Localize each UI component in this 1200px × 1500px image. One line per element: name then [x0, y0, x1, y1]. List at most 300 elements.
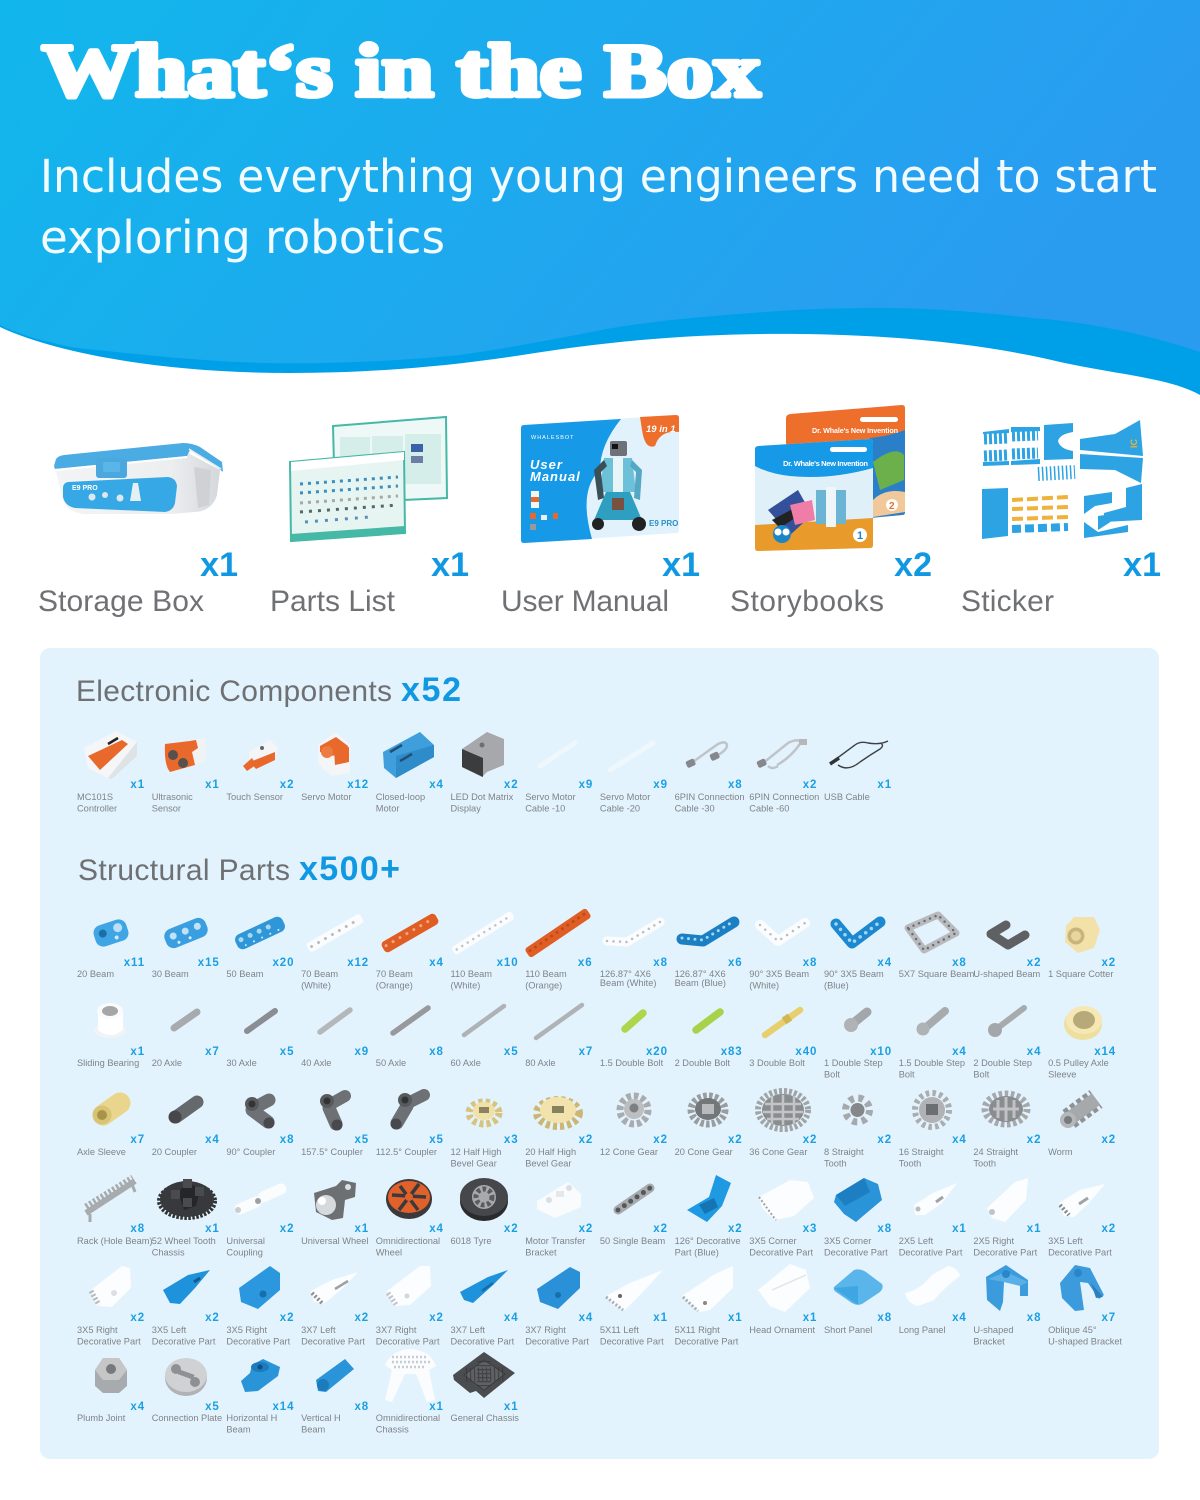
part: 2X5 Left Decorative Part: 2X5 Left	[899, 1236, 933, 1246]
part: 40 Axle: 40 Axle	[301, 1058, 331, 1068]
part: 126.87 4X6 Beam (Blue): x6	[728, 957, 743, 969]
part: 1.5 Double Step Bolt: x4	[952, 1046, 967, 1058]
item: storage box: E9 PRO	[72, 485, 98, 492]
quantity: user manual: x1	[662, 546, 700, 584]
part: 3X7 Left Decorative Part (Blue): Decorative Part	[450, 1336, 515, 1346]
part: 3X5 Left Decorative Part: x2	[1102, 1223, 1116, 1235]
part: 16 Straight Tooth	[899, 1093, 967, 1168]
part: Motor Transfer Bracket: Motor Transfer	[525, 1236, 585, 1246]
part: 60 Axle: x5	[504, 1046, 518, 1058]
part: 157.5 Coupler: x5	[355, 1134, 369, 1146]
part: 8 Straight Tooth	[824, 1098, 892, 1168]
part: 1 Double Step Bolt: Bolt	[824, 1069, 840, 1079]
part: 6PIN Connection Cable -30	[675, 742, 745, 813]
part: 60 Axle: 60 Axle	[450, 1058, 481, 1068]
part: Touch Sensor: x2	[280, 779, 294, 791]
part: 20 Half High Bevel Gear: 20 Half High	[525, 1147, 576, 1157]
part: Plumb Joint: Plumb Joint	[77, 1413, 126, 1423]
part: 70 Beam (Orange): x4	[429, 957, 444, 969]
part: 20 Half High Bevel Gear	[525, 1097, 593, 1168]
part: 110 Beam (White): x10	[497, 957, 518, 969]
part: 126.87 4X6 Beam (Blue): Beam (Blue)	[675, 978, 726, 988]
part: 112.5 Coupler: 112.5° Coupler	[376, 1147, 437, 1157]
part: 6PIN Connection Cable -30: Cable -30	[675, 803, 715, 813]
part: 12 Half High Bevel Gear	[450, 1102, 518, 1168]
part: 3X5 Left Decorative Part: Decorative Part	[1048, 1247, 1112, 1257]
item: user manual	[521, 415, 679, 543]
part: 3X5 Right Decorative Part (White): Decorative Part	[77, 1336, 141, 1346]
part: 40 Axle: x9	[355, 1046, 369, 1058]
part: Long Panel: x4	[952, 1312, 967, 1324]
part: 1.5 Double Bolt	[600, 1013, 668, 1068]
part: 6018 Tyre: 6018 Tyre	[450, 1236, 491, 1246]
part: 24 Straight Tooth: x2	[1027, 1134, 1041, 1146]
part: 5X7 Square Beam: x8	[952, 957, 967, 969]
part: 50 Single Beam: x2	[653, 1223, 668, 1235]
part: Vertical H Beam: Vertical H	[301, 1413, 341, 1423]
part: 0.5 Pulley Axle Sleeve: x14	[1094, 1046, 1116, 1058]
part: 1.5 Double Step Bolt: Bolt	[899, 1069, 915, 1079]
part: 80 Axle: 80 Axle	[525, 1058, 556, 1068]
part: 126 Decorative Part (Blue)	[675, 1175, 743, 1257]
quantity: storage box: x1	[200, 546, 238, 584]
part: Omnidirectional Chassis: Chassis	[376, 1424, 409, 1434]
part: 110 Beam (White): (White)	[450, 980, 480, 990]
part: General Chassis: x1	[504, 1401, 518, 1413]
part: 70 Beam (White): (White)	[301, 980, 331, 990]
part: 3X5 Corner Decorative Part (Blue): 3X5 Corner	[824, 1236, 871, 1246]
part: 0.5 Pulley Axle Sleeve: Sleeve	[1048, 1069, 1076, 1079]
part: Vertical H Beam: Beam	[301, 1424, 326, 1434]
part: 1.5 Double Bolt: 1.5 Double Bolt	[600, 1058, 664, 1068]
item: storybooks: Dr. Whale's New Invention	[812, 426, 898, 435]
part: Plumb Joint: x4	[130, 1401, 145, 1413]
part: 1 Square Cotter	[1048, 917, 1116, 979]
part: 16 Straight Tooth: x4	[952, 1134, 967, 1146]
part: U-shaped Bracket: x8	[1027, 1312, 1041, 1324]
item: sticker	[982, 420, 1143, 539]
quantity: sticker: x1	[1123, 546, 1161, 584]
part: 6PIN Connection Cable -60: Cable -60	[749, 803, 789, 813]
part: 30 Beam: 30 Beam	[152, 969, 189, 979]
part: 36 Cone Gear: 36 Cone Gear	[749, 1147, 807, 1157]
part: 3X5 Left Decorative Part (Blue): x2	[205, 1312, 220, 1324]
part: 2 Double Bolt: 2 Double Bolt	[675, 1058, 731, 1068]
part: Servo Motor Cable -10: Cable -10	[525, 803, 565, 813]
part: 52 Wheel Tooth Chassis: Chassis	[152, 1247, 185, 1257]
part: 20 Cone Gear: 20 Cone Gear	[675, 1147, 733, 1157]
part: 157.5 Coupler	[301, 1094, 369, 1157]
part: 3X7 Right Decorative Part (Blue): 3X7 Right	[525, 1325, 566, 1335]
part: 20 Coupler: 20 Coupler	[152, 1147, 197, 1157]
part: 16 Straight Tooth: 16 Straight	[899, 1147, 943, 1157]
part: 2X5 Right Decorative Part: Decorative Part	[973, 1247, 1038, 1257]
part: 3X7 Right Decorative Part (Blue): Decorative Part	[525, 1336, 589, 1346]
part: 5X11 Right Decorative Part: Decorative Part	[675, 1336, 739, 1346]
label: user manual: User Manual	[501, 585, 669, 618]
part: Closed-loop Motor: Closed-loop	[376, 792, 425, 802]
part: 50 Beam: 50 Beam	[226, 969, 264, 979]
part: 110 Beam (White): 110 Beam	[450, 969, 492, 979]
part: 3X7 Right Decorative Part (Blue): x4	[579, 1312, 593, 1324]
part: Head Ornament: Head Ornament	[749, 1325, 816, 1335]
part: 3X7 Left Decorative Part (Blue)	[450, 1270, 518, 1346]
part: 126.87 4X6 Beam (Blue)	[675, 921, 743, 988]
part: 3X7 Right Decorative Part (White): x2	[429, 1312, 444, 1324]
part: Worm	[1048, 1099, 1116, 1157]
part: U-shaped Bracket	[973, 1265, 1041, 1346]
part: LED Dot Matrix Display: Display	[450, 803, 481, 813]
part: Motor Transfer Bracket	[525, 1182, 593, 1257]
part: 50 Single Beam: 50 Single Beam	[600, 1236, 666, 1246]
part: 126.87 4X6 Beam (White)	[600, 922, 668, 988]
part: 2X5 Left Decorative Part: x1	[952, 1223, 967, 1235]
part: 90 Coupler: 90° Coupler	[226, 1147, 275, 1157]
part: 30 Axle	[226, 1011, 294, 1068]
part: 5X11 Left Decorative Part: 5X11 Left	[600, 1325, 639, 1335]
part: 126 Decorative Part (Blue): x2	[728, 1223, 743, 1235]
subtitle: Includes everything young engineers need to start	[40, 150, 1157, 203]
part: 3X5 Left Decorative Part (Blue)	[152, 1270, 220, 1346]
part: Universal Coupling	[226, 1189, 294, 1257]
part: 1 Square Cotter: x2	[1102, 957, 1116, 969]
part: 2X5 Right Decorative Part	[973, 1178, 1041, 1257]
part: 3X5 Corner Decorative Part (Blue)	[824, 1178, 892, 1257]
part: 3X5 Right Decorative Part (White)	[77, 1266, 145, 1346]
part: 110 Beam (Orange): (Orange)	[525, 980, 562, 990]
part: 12 Half High Bevel Gear: Bevel Gear	[450, 1158, 497, 1168]
item: storybooks: Dr. Whale's New Invention	[783, 459, 868, 468]
part: 1 Double Step Bolt	[824, 1012, 892, 1079]
part: 6PIN Connection Cable -30: 6PIN Connection	[675, 792, 745, 802]
part: 6PIN Connection Cable -30: x8	[728, 779, 743, 791]
part: Servo Motor Cable -20: Servo Motor	[600, 792, 650, 802]
part: 5X11 Left Decorative Part	[600, 1270, 668, 1346]
part: 3X5 Right Decorative Part (Blue): x2	[280, 1312, 294, 1324]
part: Sliding Bearing: x1	[130, 1046, 145, 1058]
part: Universal Wheel: x1	[355, 1223, 369, 1235]
part: USB Cable: x1	[877, 779, 892, 791]
part: 1 Double Step Bolt: x10	[870, 1046, 892, 1058]
part: 52 Wheel Tooth Chassis: 52 Wheel Tooth	[152, 1236, 216, 1246]
part: 3X5 Corner Decorative Part (White): Decorative Part	[749, 1247, 813, 1257]
part: Oblique 45 U-shaped Bracket	[1048, 1265, 1123, 1346]
part: Axle Sleeve: Axle Sleeve	[77, 1147, 126, 1157]
part: 157.5 Coupler: 157.5° Coupler	[301, 1147, 363, 1157]
item: storybooks: 1	[857, 530, 863, 542]
part: Connection Plate: Connection Plate	[152, 1413, 222, 1423]
part: 2 Double Bolt: x83	[721, 1046, 743, 1058]
part: Horizontal H Beam: Beam	[226, 1424, 251, 1434]
part: 90 3X5 Beam (White): x8	[803, 957, 817, 969]
part: 2 Double Step Bolt: x4	[1027, 1046, 1041, 1058]
label: storybooks: Storybooks	[730, 585, 884, 618]
item: user manual: User	[530, 457, 563, 472]
part: Oblique 45 U-shaped Bracket: U-shaped Bracket	[1048, 1336, 1123, 1346]
part: Universal Coupling: Universal	[226, 1236, 265, 1246]
part: 3X7 Right Decorative Part (White): Decorative Part	[376, 1336, 440, 1346]
part: Vertical H Beam	[301, 1359, 369, 1434]
part: 8 Straight Tooth: Tooth	[824, 1158, 847, 1168]
part: 126 Decorative Part (Blue): Part (Blue)	[675, 1247, 719, 1257]
part: Servo Motor: Servo Motor	[301, 792, 351, 802]
part: 110 Beam (Orange): 110 Beam	[525, 969, 567, 979]
part: 126.87 4X6 Beam (Blue): 126.87° 4X6	[675, 969, 726, 979]
part: 30 Axle: 30 Axle	[226, 1058, 257, 1068]
part: 20 Coupler	[152, 1102, 220, 1157]
part: Head Ornament: x1	[803, 1312, 817, 1324]
item: storage box	[54, 443, 223, 514]
part: 90 Coupler	[226, 1097, 294, 1157]
part: 6PIN Connection Cable -60: 6PIN Connection	[749, 792, 819, 802]
part: 12 Half High Bevel Gear: 12 Half High	[450, 1147, 501, 1157]
part: 3X7 Left Decorative Part (Blue): 3X7 Left	[450, 1325, 485, 1335]
part: U-shaped Beam	[973, 925, 1041, 979]
count: structural parts: x500+	[299, 850, 400, 888]
part: 30 Beam	[152, 915, 220, 979]
part: 1.5 Double Bolt: x20	[646, 1046, 668, 1058]
part: 1 Square Cotter: 1 Square Cotter	[1048, 969, 1113, 979]
part: 50 Beam	[226, 915, 294, 979]
part: 6018 Tyre	[450, 1178, 518, 1246]
part: 20 Beam	[77, 917, 145, 979]
part: 50 Axle: x8	[429, 1046, 444, 1058]
part: 6PIN Connection Cable -60	[749, 739, 819, 813]
part: Long Panel	[899, 1266, 967, 1335]
part: 12 Half High Bevel Gear: x3	[504, 1134, 518, 1146]
part: 90 3X5 Beam (Blue): x4	[877, 957, 892, 969]
part: LED Dot Matrix Display: x2	[504, 779, 518, 791]
part: 8 Straight Tooth: 8 Straight	[824, 1147, 864, 1157]
part: 3X5 Corner Decorative Part (Blue): x8	[877, 1223, 892, 1235]
item: storybooks	[755, 405, 905, 551]
part: 52 Wheel Tooth Chassis	[152, 1179, 220, 1257]
panel: components	[40, 648, 1159, 1459]
part: 3X7 Right Decorative Part (White): 3X7 Right	[376, 1325, 416, 1335]
part: 3 Double Bolt: 3 Double Bolt	[749, 1058, 805, 1068]
heading: electronic components: Electronic Components	[76, 675, 392, 708]
part: 12 Cone Gear: 12 Cone Gear	[600, 1147, 658, 1157]
part: 3X5 Right Decorative Part (White): 3X5 Right	[77, 1325, 118, 1335]
part: 3X5 Corner Decorative Part (White): x3	[803, 1223, 817, 1235]
part: 40 Axle	[301, 1010, 369, 1068]
title: What‘s in the Box	[42, 30, 761, 113]
part: Vertical H Beam: x8	[355, 1401, 369, 1413]
part: U-shaped Beam: x2	[1027, 957, 1041, 969]
part: 126.87 4X6 Beam (White): 126.87° 4X6	[600, 969, 651, 979]
part: 30 Axle: x5	[280, 1046, 294, 1058]
part: 3X5 Right Decorative Part (Blue)	[226, 1266, 294, 1346]
part: 6PIN Connection Cable -60: x2	[803, 779, 817, 791]
part: MC101S Controller: x1	[130, 779, 145, 791]
part: LED Dot Matrix Display	[450, 732, 518, 813]
part: Servo Motor Cable -10	[525, 743, 593, 813]
part: 3X5 Left Decorative Part: 3X5 Left	[1048, 1236, 1083, 1246]
part: 50 Axle	[376, 1008, 444, 1068]
part: 80 Axle	[525, 1005, 593, 1068]
part: 112.5 Coupler: x5	[429, 1134, 444, 1146]
part: Universal Coupling: x2	[280, 1223, 294, 1235]
part: 0.5 Pulley Axle Sleeve: 0.5 Pulley Axle	[1048, 1058, 1109, 1068]
part: 90 3X5 Beam (Blue): (Blue)	[824, 980, 849, 990]
part: 0.5 Pulley Axle Sleeve	[1048, 1006, 1116, 1079]
part: 20 Cone Gear: x2	[728, 1134, 743, 1146]
part: 3X5 Right Decorative Part (Blue): Decorative Part	[226, 1336, 291, 1346]
part: 3X7 Right Decorative Part (White)	[376, 1266, 444, 1346]
part: MC101S Controller: MC101S	[77, 792, 113, 802]
part: Closed-loop Motor: Motor	[376, 803, 399, 813]
item: storybooks: 2	[889, 501, 895, 512]
count: electronic components: x52	[401, 671, 461, 709]
part: 3X7 Left Decorative Part (Blue): x4	[504, 1312, 518, 1324]
part: 5X11 Right Decorative Part: 5X11 Right	[675, 1325, 720, 1335]
part: Connection Plate: x5	[205, 1401, 220, 1413]
part: U-shaped Beam: U-shaped Beam	[973, 969, 1041, 979]
part: 20 Cone Gear	[675, 1096, 743, 1157]
part: General Chassis	[450, 1352, 519, 1423]
part: Omnidirectional Chassis: Omnidirectional	[376, 1413, 440, 1423]
part: 3X7 Left Decorative Part (White): Decorative Part	[301, 1336, 365, 1346]
part: 90 3X5 Beam (White): 90° 3X5 Beam	[749, 969, 809, 979]
part: 90 Coupler: x8	[280, 1134, 294, 1146]
part: 24 Straight Tooth: 24 Straight	[973, 1147, 1018, 1157]
part: Rack (Hole Beam): x8	[130, 1223, 145, 1235]
part: 20 Axle: x7	[205, 1046, 220, 1058]
part: 3 Double Bolt: x40	[795, 1046, 817, 1058]
part: General Chassis: General Chassis	[450, 1413, 519, 1423]
part: Servo Motor	[301, 732, 369, 802]
part: 2X5 Right Decorative Part: x1	[1027, 1223, 1041, 1235]
part: 90 3X5 Beam (Blue)	[824, 922, 892, 990]
part: Motor Transfer Bracket: Bracket	[525, 1247, 557, 1257]
part: 3X5 Corner Decorative Part (White)	[749, 1180, 817, 1257]
part: Plumb Joint	[77, 1358, 145, 1423]
part: 60 Axle	[450, 1006, 518, 1068]
part: Long Panel: Long Panel	[899, 1325, 946, 1335]
part: 5X7 Square Beam: 5X7 Square Beam	[899, 969, 975, 979]
part: 70 Beam (White): 70 Beam	[301, 969, 338, 979]
subtitle: exploring robotics	[40, 211, 445, 264]
part: Servo Motor Cable -20: Cable -20	[600, 803, 640, 813]
part: Servo Motor Cable -10: x9	[579, 779, 593, 791]
part: 20 Half High Bevel Gear: Bevel Gear	[525, 1158, 571, 1168]
part: 24 Straight Tooth: Tooth	[973, 1158, 996, 1168]
part: Connection Plate	[152, 1358, 222, 1423]
part: Servo Motor: x12	[347, 779, 369, 791]
part: Omnidirectional Wheel: Wheel	[376, 1247, 402, 1257]
part: 6018 Tyre: x2	[504, 1223, 518, 1235]
part: Short Panel	[824, 1269, 892, 1335]
part: 3X5 Right Decorative Part (White): x2	[130, 1312, 145, 1324]
part: Oblique 45 U-shaped Bracket: Oblique 45°	[1048, 1325, 1097, 1335]
part: 3X7 Left Decorative Part (White): 3X7 Left	[301, 1325, 336, 1335]
part: 2 Double Step Bolt: Bolt	[973, 1069, 990, 1079]
quantity: storybooks: x2	[894, 546, 932, 584]
part: Rack (Hole Beam): Rack (Hole Beam)	[77, 1236, 153, 1246]
part: Servo Motor Cable -10: Servo Motor	[525, 792, 576, 802]
part: Motor Transfer Bracket: x2	[579, 1223, 593, 1235]
part: Omnidirectional Wheel: x4	[429, 1223, 444, 1235]
header wave: darker band	[0, 0, 1200, 395]
part: 5X11 Left Decorative Part: x1	[653, 1312, 668, 1324]
part: MC101S Controller	[77, 731, 145, 813]
part: 2 Double Step Bolt	[973, 1008, 1041, 1079]
part: Worm: x2	[1102, 1134, 1116, 1146]
part: Oblique 45 U-shaped Bracket: x7	[1102, 1312, 1116, 1324]
part: Sliding Bearing: Sliding Bearing	[77, 1058, 139, 1068]
part: 2X5 Left Decorative Part	[899, 1183, 967, 1257]
part: 110 Beam (Orange)	[524, 908, 592, 990]
part: MC101S Controller: Controller	[77, 803, 117, 813]
item: user manual: E9 PRO	[649, 519, 678, 528]
part: 12 Cone Gear	[600, 1096, 668, 1157]
part: 1.5 Double Step Bolt	[899, 1011, 967, 1079]
part: 126 Decorative Part (Blue): 126° Decorative	[675, 1236, 741, 1246]
part: 50 Axle: 50 Axle	[376, 1058, 406, 1068]
part: USB Cable	[824, 741, 892, 802]
item: sticker: IC	[1129, 438, 1139, 448]
part: 110 Beam (Orange): x6	[578, 957, 592, 969]
part: 112.5 Coupler	[376, 1093, 444, 1157]
part: 5X11 Right Decorative Part: x1	[728, 1312, 743, 1324]
part: 5X11 Left Decorative Part: Decorative Part	[600, 1336, 664, 1346]
part: Universal Coupling: Coupling	[226, 1247, 263, 1257]
part: 70 Beam (Orange): (Orange)	[376, 980, 413, 990]
part: Universal Wheel	[301, 1180, 369, 1246]
part: Ultrasonic Sensor	[152, 738, 220, 813]
part: 3X5 Left Decorative Part	[1048, 1184, 1116, 1257]
part: 3X7 Left Decorative Part (White): x2	[355, 1312, 369, 1324]
part: 20 Half High Bevel Gear: x2	[579, 1134, 593, 1146]
subtitle	[40, 150, 1157, 264]
part: Axle Sleeve: x7	[130, 1134, 145, 1146]
part: Closed-loop Motor: x4	[429, 779, 444, 791]
part: Omnidirectional Chassis	[376, 1349, 444, 1434]
part: Worm: Worm	[1048, 1147, 1073, 1157]
part: 20 Axle	[152, 1012, 220, 1068]
label: storage box: Storage Box	[38, 585, 204, 618]
part: Servo Motor Cable -20	[600, 743, 668, 813]
part: 80 Axle: x7	[579, 1046, 593, 1058]
part: Ultrasonic Sensor: x1	[205, 779, 220, 791]
part: 2 Double Step Bolt: 2 Double Step	[973, 1058, 1032, 1068]
part: 3X5 Left Decorative Part (Blue): 3X5 Left	[152, 1325, 186, 1335]
part: 90 3X5 Beam (White): (White)	[749, 980, 779, 990]
part: 12 Cone Gear: x2	[653, 1134, 668, 1146]
part: 3X5 Left Decorative Part (Blue): Decorative Part	[152, 1336, 216, 1346]
heading: structural parts: Structural Parts	[78, 854, 290, 887]
part: 70 Beam (Orange): 70 Beam	[376, 969, 413, 979]
quantity: parts list: x1	[431, 546, 469, 584]
part: 50 Beam: x20	[273, 957, 294, 969]
part: Touch Sensor	[226, 740, 294, 802]
part: 5X7 Square Beam	[899, 915, 975, 979]
item: parts list	[290, 417, 447, 541]
part: 20 Coupler: x4	[205, 1134, 220, 1146]
part: 70 Beam (White): x12	[347, 957, 369, 969]
part: 90 3X5 Beam (Blue): 90° 3X5 Beam	[824, 969, 884, 979]
part: 36 Cone Gear	[749, 1091, 817, 1157]
part: Touch Sensor: Touch Sensor	[226, 792, 283, 802]
part: 2X5 Right Decorative Part: 2X5 Right	[973, 1236, 1014, 1246]
part: 20 Beam: x11	[124, 957, 145, 969]
part: Head Ornament	[749, 1264, 817, 1335]
part: 1.5 Double Step Bolt: 1.5 Double Step	[899, 1058, 965, 1068]
part: Short Panel: x8	[877, 1312, 892, 1324]
header banner	[0, 0, 1200, 363]
part: Ultrasonic Sensor: Ultrasonic	[152, 792, 193, 802]
part: Short Panel: Short Panel	[824, 1325, 872, 1335]
